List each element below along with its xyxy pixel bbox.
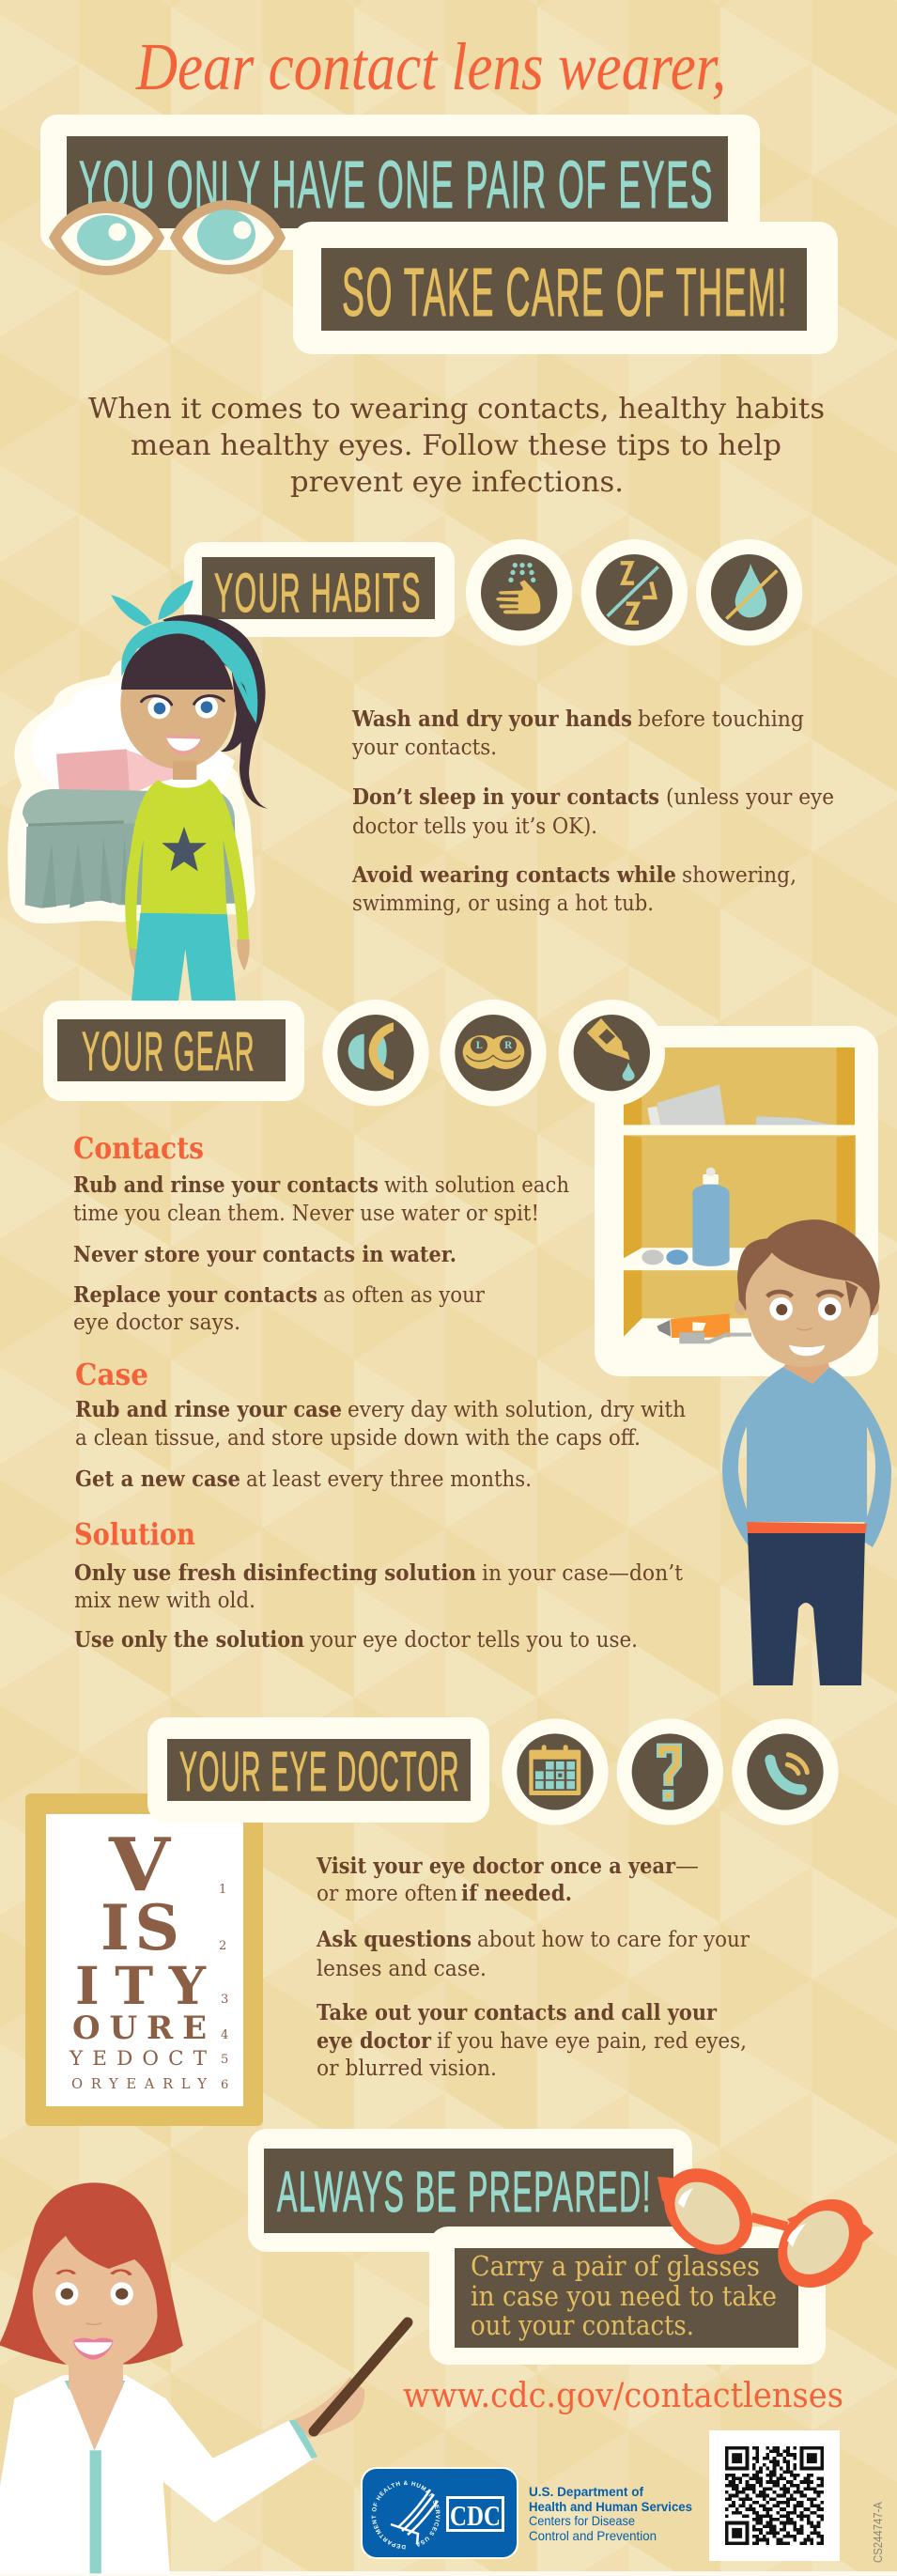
agency text [529, 2484, 692, 2543]
gear: solution section: your eye doctor tells you to use. [309, 1628, 638, 1653]
publication code: CS244747-A [871, 2502, 885, 2563]
icon: lens case: R [504, 1041, 513, 1051]
habits text: Wash and dry your hands [351, 706, 632, 732]
gear: contacts section: with solution each [384, 1173, 569, 1198]
callout: carry glasses [429, 2227, 826, 2365]
gear: case section: Case [75, 1357, 148, 1392]
gear: case section: Get a new case [75, 1466, 240, 1492]
icon: lens case [440, 1000, 547, 1106]
eye doctor text: Take out your contacts and call your [317, 2000, 718, 2025]
gear: contacts section: time you clean them. Never use water or spit! [73, 1202, 539, 1226]
eye chart: YEDOCT [69, 2047, 208, 2071]
habits text: showering, [682, 863, 796, 888]
gear: solution section: Use only the solution [74, 1627, 304, 1653]
eye doctor text: or more often [317, 1882, 457, 1906]
eye doctor text: if needed. [461, 1881, 572, 1906]
habits text: your contacts. [351, 736, 497, 760]
icon: solution bottle [559, 1000, 665, 1106]
gear: contacts section: Rub and rinse your contacts [73, 1172, 379, 1198]
habits text: doctor tells you it’s OK). [352, 815, 597, 839]
agency text: U.S. Department of [529, 2484, 643, 2499]
illustration: medicine cabinet [595, 1026, 878, 1376]
gear: case section [75, 1357, 686, 1492]
eye doctor text [316, 1854, 750, 2081]
icon: no water [696, 539, 802, 645]
illustration: girl and bed [8, 580, 268, 1001]
heading: your eye doctor: YOUR EYE DOCTOR [179, 1741, 460, 1803]
heading: your gear: YOUR GEAR [82, 1021, 255, 1082]
gear: solution section [74, 1516, 684, 1653]
logo: HHS and CDC [361, 2467, 518, 2559]
habits text: before touching [638, 707, 804, 732]
habit icons [466, 539, 802, 645]
habits text: Avoid wearing contacts while [351, 862, 676, 888]
eye doctor text: about how to care for your [477, 1928, 750, 1952]
illustration: man [722, 1219, 891, 1685]
logo: HHS and CDC: DEPARTMENT OF HEALTH & HUMAN SERVICES USA [372, 2480, 440, 2550]
icon: contact lens on eye [322, 1000, 429, 1106]
gear: contacts section: eye doctor says. [73, 1311, 240, 1335]
heading: your gear [43, 1001, 304, 1101]
icon: wash hands [466, 539, 572, 645]
icon: no sleeping [581, 539, 688, 645]
gear: case section: Rub and rinse your case [75, 1397, 342, 1422]
gear icons [322, 1000, 665, 1106]
icon: phone [732, 1718, 839, 1825]
logo: HHS and CDC: CDC [450, 2499, 501, 2532]
intro text: mean healthy eyes. Follow these tips to help [131, 429, 781, 462]
banner: always be prepared [248, 2129, 692, 2252]
heading: your eye doctor [147, 1717, 489, 1823]
icon: pair of eyes [49, 200, 286, 275]
eye doctor text: lenses and case. [317, 1957, 487, 1981]
gear: solution section: Only use fresh disinfecting solution [74, 1560, 476, 1586]
agency text: Centers for Disease [529, 2513, 635, 2528]
gear: solution section: in your case—don’t [482, 1561, 684, 1586]
icon: question mark [617, 1718, 723, 1825]
agency text: Control and Prevention [529, 2528, 657, 2543]
doctor icons [502, 1718, 839, 1825]
heading: your habits: YOUR HABITS [214, 563, 422, 624]
gear: case section: a clean tissue, and store upside down with the caps off. [75, 1426, 641, 1451]
eye doctor text: or blurred vision. [317, 2056, 497, 2081]
gear: case section: at least every three months. [246, 1467, 532, 1492]
gear: contacts section: Never store your contacts in water. [73, 1242, 456, 1267]
intro text [88, 393, 825, 499]
heading: your habits [184, 542, 455, 637]
eye chart: ORYEARLY [71, 2076, 207, 2092]
eye chart: 5 [221, 2053, 228, 2067]
eye chart: 1 [219, 1883, 226, 1897]
callout: carry glasses: Carry a pair of glasses [471, 2250, 760, 2282]
habits text: (unless your eye [666, 785, 834, 810]
gear: contacts section: Contacts [73, 1130, 204, 1166]
icon: red glasses [647, 2150, 882, 2304]
illustration: doctor with pointer [0, 2182, 408, 2573]
eye chart: ITY [75, 1955, 207, 2016]
gear: case section: every day with solution, dry with [348, 1398, 686, 1422]
habits text [351, 706, 834, 916]
gear: contacts section: as often as your [323, 1283, 485, 1308]
intro text: prevent eye infections. [290, 466, 624, 499]
intro text: When it comes to wearing contacts, healthy habits [88, 393, 825, 426]
banner: you only have one pair of eyes [40, 115, 760, 250]
eye chart [25, 1793, 263, 2126]
gear: solution section: mix new with old. [74, 1589, 255, 1613]
eye chart: 6 [221, 2078, 228, 2092]
eye chart: 3 [221, 1993, 228, 2007]
gear: contacts section [73, 1130, 569, 1335]
habits text: swimming, or using a hot tub. [352, 892, 654, 916]
eye chart: OURE [72, 2010, 207, 2047]
callout: carry glasses: out your contacts. [471, 2309, 694, 2341]
banner: so take care of them [293, 222, 838, 354]
eye chart: 2 [219, 1939, 226, 1953]
icon: calendar [502, 1718, 609, 1825]
eye chart: 4 [221, 2028, 228, 2042]
eye doctor text: Visit your eye doctor once a year [316, 1854, 676, 1879]
QR code [709, 2430, 840, 2561]
title: Dear contact lens wearer, [135, 29, 726, 104]
url: www.cdc.gov/contactlenses [403, 2377, 843, 2415]
callout: carry glasses: in case you need to take [471, 2280, 777, 2312]
eye doctor text: eye doctor [317, 2028, 432, 2054]
eye chart: IS [101, 1891, 179, 1964]
habits text: Don’t sleep in your contacts [352, 784, 659, 810]
eye chart: V [108, 1823, 172, 1908]
gear: contacts section: Replace your contacts [73, 1282, 317, 1308]
eye doctor text: Ask questions [316, 1927, 472, 1952]
agency text: Health and Human Services [529, 2499, 692, 2514]
gear: solution section: Solution [74, 1516, 195, 1552]
bottom edge [0, 2571, 897, 2576]
icon: lens case: L [475, 1041, 482, 1051]
eye doctor text: — [675, 1854, 699, 1879]
eye doctor text: if you have eye pain, red eyes, [437, 2029, 747, 2054]
